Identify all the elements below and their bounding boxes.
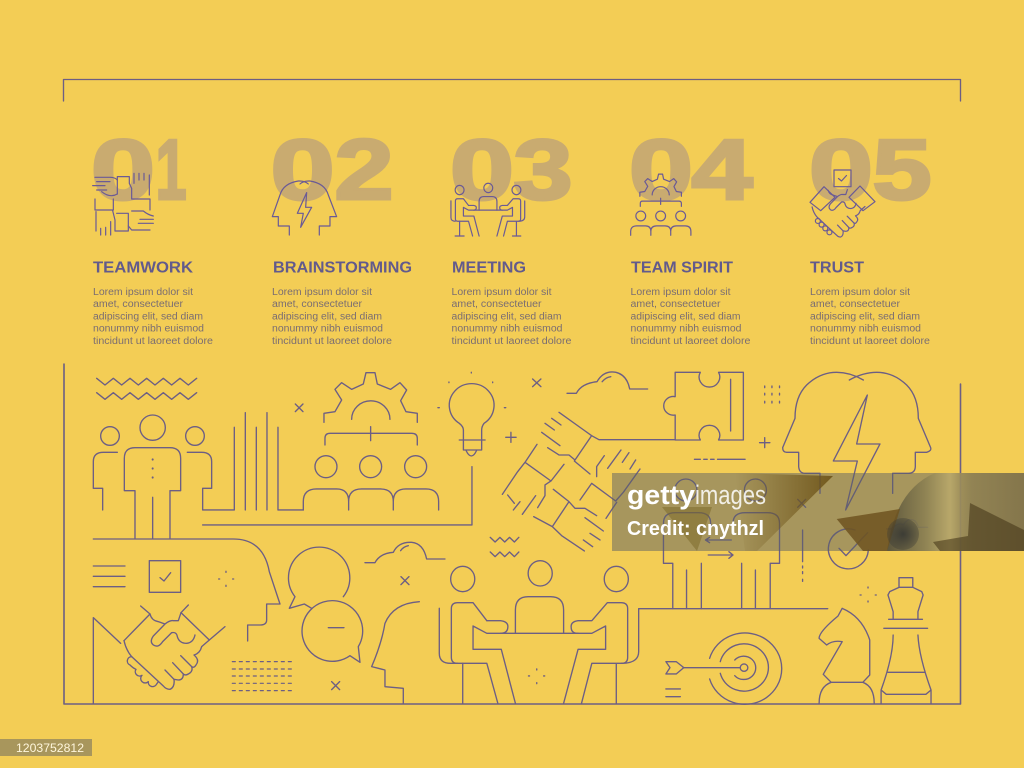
number 05: 0 <box>809 123 873 218</box>
cloud <box>887 520 928 529</box>
column: team spirit text: Lorem ipsum dolor sit <box>630 287 731 298</box>
number 05: 5 <box>872 123 932 218</box>
column: meeting text: tincidunt ut laoreet dolore <box>452 336 572 347</box>
second head profile <box>372 602 419 703</box>
zigzag lines <box>97 378 197 399</box>
top frame bracket <box>64 80 960 101</box>
icon: lightning bolt <box>833 395 880 510</box>
gear team <box>303 373 439 510</box>
checkbox <box>149 561 181 592</box>
x mark <box>533 379 541 387</box>
illustration: handshake, head and speech bubbles <box>93 539 445 703</box>
number 03: 0 <box>450 123 514 218</box>
column: team spirit text: amet, consectetuer <box>630 299 721 310</box>
cloud <box>567 372 648 393</box>
icon: teamwork hands <box>93 173 153 235</box>
speech bubble one <box>288 547 350 608</box>
column: brainstorming text: adipiscing elit, sed diam <box>272 312 382 322</box>
column: teamwork text: amet, consectetuer <box>93 299 184 310</box>
icon: team spirit gear and people <box>631 174 691 235</box>
image id tag: 1203752812 <box>16 743 84 755</box>
dot grid <box>232 662 293 691</box>
group of three people <box>93 415 234 538</box>
watermark logo text: gettyimages <box>627 480 766 510</box>
icon: trust handshake with checkbox <box>810 170 875 237</box>
column: trust text: adipiscing elit, sed diam <box>810 312 920 322</box>
column: trust text: nonummy nibh euismod <box>810 324 921 335</box>
column: meeting text: Lorem ipsum dolor sit <box>452 287 552 298</box>
triangle sleeve <box>93 618 121 703</box>
column: team spirit text: nonummy nibh euismod <box>630 324 742 335</box>
icon: puzzle piece <box>664 372 743 440</box>
column: trust text: amet, consectetuer <box>810 299 901 310</box>
illustration: meeting, team, target and chess <box>439 479 931 704</box>
column: team spirit text <box>630 260 751 347</box>
illustration: stacked hands <box>502 412 675 551</box>
column: brainstorming text: amet, consectetuer <box>272 299 363 310</box>
target with arrow <box>666 633 782 704</box>
column: trust text: Lorem ipsum dolor sit <box>810 287 910 298</box>
sparkle <box>860 587 876 602</box>
icon: meeting <box>451 183 525 236</box>
column: teamwork text <box>93 260 213 347</box>
number 01: 0 <box>91 123 155 218</box>
watermark credit: Credit: cnythzl <box>627 518 764 540</box>
column: brainstorming text: Lorem ipsum dolor sit <box>272 287 372 298</box>
illustration: team of people with gear <box>93 373 472 538</box>
column: team spirit text: adipiscing elit, sed diam <box>630 312 740 322</box>
icon: check circle <box>828 529 868 569</box>
column: teamwork text: nonummy nibh euismod <box>93 324 204 335</box>
illustration: large handshake <box>124 605 225 689</box>
column: trust text: tincidunt ut laoreet dolore <box>810 336 930 347</box>
meeting people at table <box>439 561 828 703</box>
plus <box>506 432 516 442</box>
column: meeting text: amet, consectetuer <box>452 299 542 310</box>
column: team spirit text: TEAM SPIRIT <box>631 260 733 276</box>
chess knight <box>819 608 874 703</box>
x marks <box>332 577 409 690</box>
speech bubble two <box>302 601 363 662</box>
zigzag small <box>490 537 519 557</box>
column: teamwork text: Lorem ipsum dolor sit <box>93 287 193 298</box>
column: trust text: TRUST <box>810 260 864 276</box>
column: teamwork text: tincidunt ut laoreet dolore <box>93 336 213 347</box>
connector line <box>203 467 472 525</box>
watermark banner <box>612 473 1024 551</box>
column: meeting text: adipiscing elit, sed diam <box>452 312 562 322</box>
plus <box>760 438 770 448</box>
column: brainstorming text: BRAINSTORMING <box>273 260 412 276</box>
column: team spirit text: tincidunt ut laoreet dolore <box>630 336 751 347</box>
illustration: heads with lightning bolt <box>783 372 931 569</box>
illustration: bulb, cloud, puzzle and hands <box>438 372 780 459</box>
column: brainstorming text <box>272 260 412 347</box>
icon: brainstorming heads <box>272 181 337 235</box>
column: trust text <box>810 260 930 347</box>
column: meeting text: MEETING <box>452 260 526 276</box>
number 03: 3 <box>514 123 572 218</box>
column: teamwork text: TEAMWORK <box>93 260 193 276</box>
two team people <box>663 479 780 609</box>
head profile <box>93 539 280 641</box>
vertical lines <box>245 413 303 510</box>
column: meeting text <box>452 260 572 347</box>
chess king <box>881 578 931 703</box>
column: brainstorming text: nonummy nibh euismod <box>272 324 383 335</box>
cloud <box>365 542 445 563</box>
number 04: 0 <box>629 123 693 218</box>
column: teamwork text: adipiscing elit, sed diam <box>93 312 203 322</box>
dashed vertical line <box>802 530 804 581</box>
x mark <box>798 499 806 507</box>
column: brainstorming text: tincidunt ut laoreet dolore <box>272 336 392 347</box>
image id tag <box>0 739 92 756</box>
icon: light bulb <box>438 372 506 456</box>
number 04: 4 <box>692 123 752 218</box>
x mark <box>295 404 303 412</box>
number 01: 1 <box>156 123 187 218</box>
bottom frame <box>64 364 960 704</box>
list lines <box>93 566 125 587</box>
number 02: 0 <box>271 123 335 218</box>
dots <box>765 386 780 403</box>
column: meeting text: nonummy nibh euismod <box>452 324 562 335</box>
number 02: 2 <box>334 123 394 218</box>
sparkle <box>219 571 234 586</box>
dashed line <box>694 458 745 460</box>
